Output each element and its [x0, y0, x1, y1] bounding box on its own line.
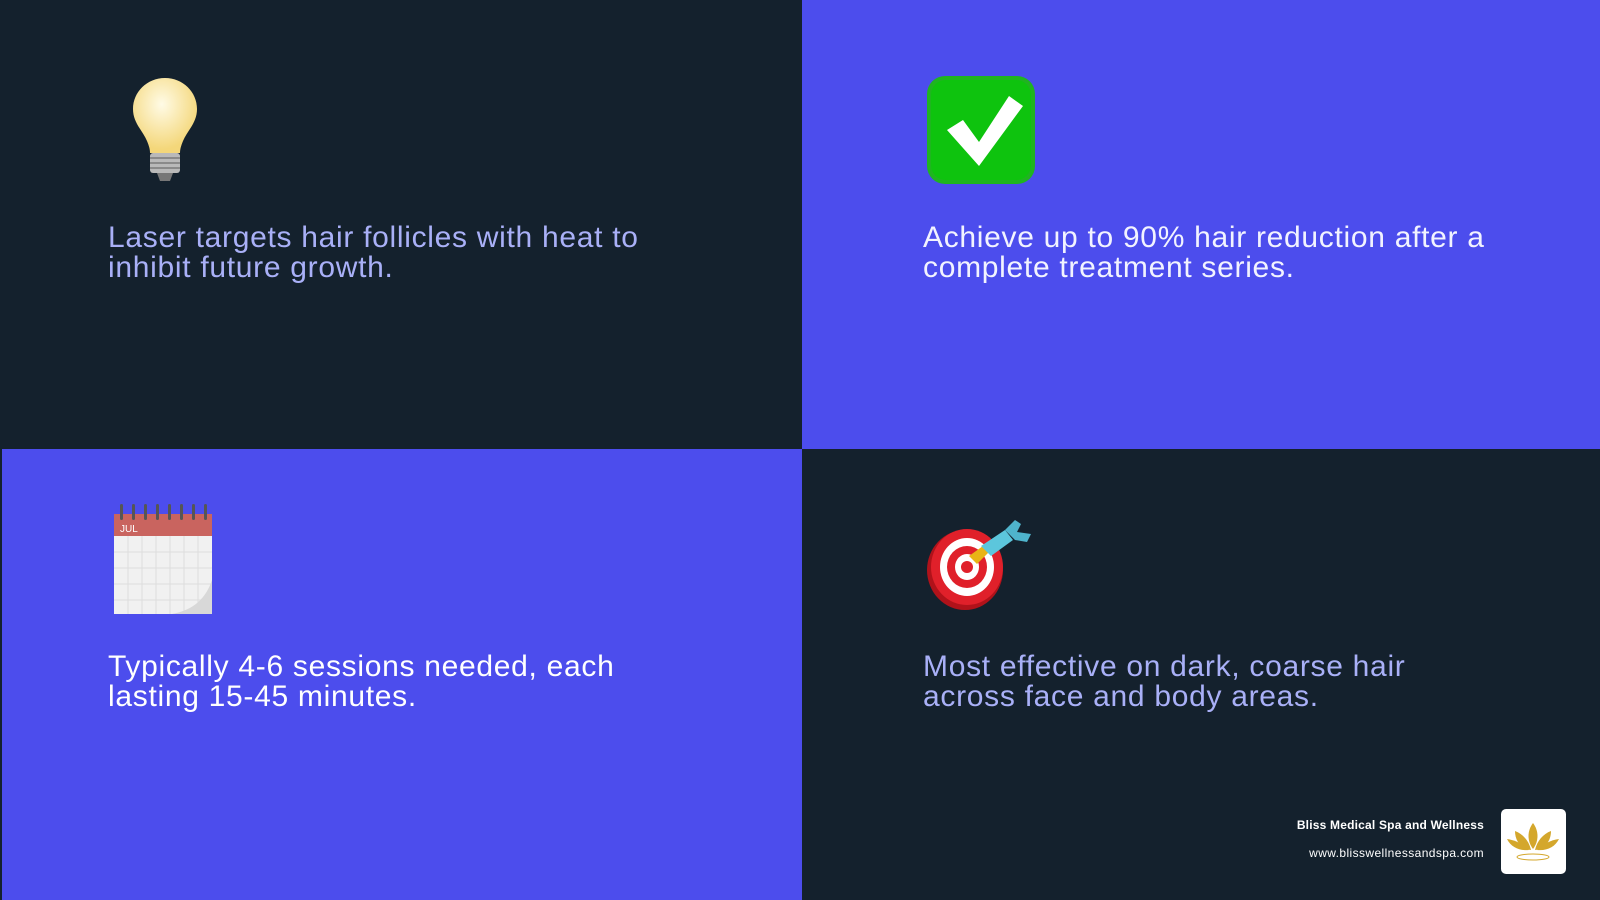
brand url: www.blisswellnessandspa.com: [1309, 846, 1484, 860]
text: sessions: [108, 650, 614, 713]
panel: results: [802, 0, 1600, 449]
panel: effectiveness: [802, 449, 1600, 900]
text: results: [923, 221, 1485, 284]
icon: check mark: [927, 76, 1035, 184]
text: results: complete treatment series.: [923, 251, 1295, 284]
text: mechanism: inhibit future growth.: [108, 251, 394, 284]
text: effectiveness: across face and body areas.: [923, 680, 1319, 713]
text: mechanism: Laser targets hair follicles with heat to: [108, 221, 639, 254]
text: mechanism: [108, 221, 639, 284]
brand footer: [1297, 809, 1566, 874]
panel: sessions: [2, 449, 802, 900]
icon: calendar: JUL: [120, 524, 138, 535]
text: effectiveness: Most effective on dark, coarse hair: [923, 650, 1406, 683]
panel: mechanism: [2, 0, 802, 449]
brand name: Bliss Medical Spa and Wellness: [1297, 818, 1484, 832]
text: sessions: Typically 4-6 sessions needed, each: [108, 650, 614, 683]
icon: calendar: [114, 504, 212, 614]
icon: target: [927, 520, 1031, 610]
logo: lotus: [1501, 809, 1566, 874]
icon: light bulb: [133, 78, 197, 181]
text: results: Achieve up to 90% hair reduction after a: [923, 221, 1485, 254]
text: effectiveness: [923, 650, 1406, 713]
text: sessions: lasting 15-45 minutes.: [108, 680, 417, 713]
